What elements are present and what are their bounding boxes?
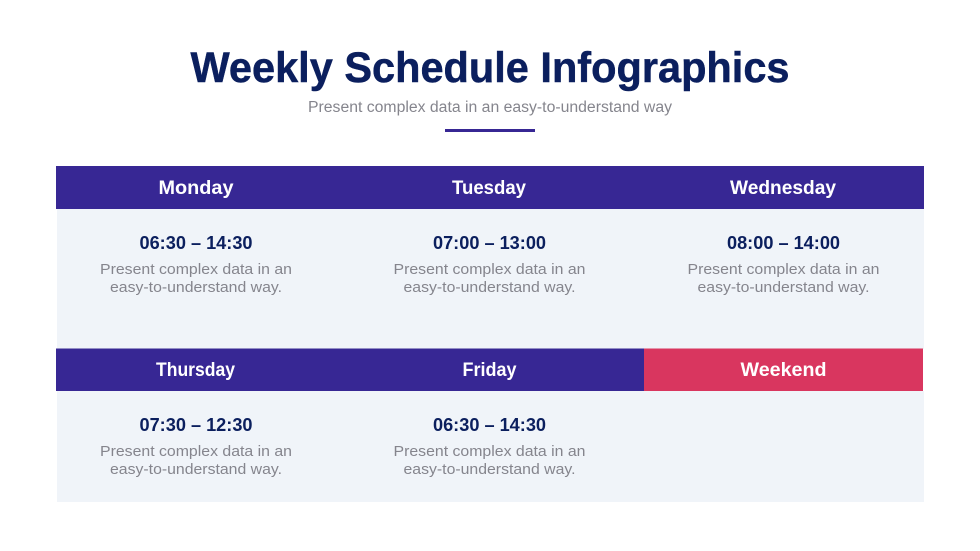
column: Tuesday: easy-to-understand way. [404,279,576,296]
column: Monday [100,178,292,296]
column: Thursday: 07:30 – 12:30 [140,414,252,435]
column: Wednesday: Present complex data in an [688,261,880,278]
column: Wednesday: easy-to-understand way. [698,279,870,296]
column: Thursday: easy-to-understand way. [110,461,282,478]
column: Friday: Present complex data in an [394,443,586,460]
column: Friday: 06:30 – 14:30 [433,414,546,435]
header bar: second row weekdays [56,348,644,391]
column: Tuesday [394,178,586,296]
column: Weekend: Weekend [740,360,826,381]
column: Wednesday: 08:00 – 14:00 [727,232,840,253]
subtitle: Present complex data in an easy-to-understand way [308,99,672,116]
column: Monday: 06:30 – 14:30 [140,232,252,253]
column: Thursday: Present complex data in an [100,443,292,460]
column: Wednesday: Wednesday [730,178,836,199]
panel: second row background [57,391,924,502]
column: Thursday [100,360,292,478]
column: Monday: Monday [158,178,234,199]
column: Tuesday: 07:00 – 13:00 [433,232,546,253]
panel: first row background [57,209,924,349]
column: Monday: easy-to-understand way. [110,279,282,296]
title underline [445,129,535,132]
column: Monday: Present complex data in an [100,261,292,278]
header bar: weekend [644,348,923,391]
header bar: first row [56,166,924,209]
column: Friday: easy-to-understand way. [404,461,576,478]
column: Friday: Friday [462,360,517,381]
column: Tuesday: Present complex data in an [394,261,586,278]
column: Friday [394,360,586,478]
column: Wednesday [688,178,880,296]
column: Thursday: Thursday [156,360,235,381]
column: Tuesday: Tuesday [452,178,526,199]
title: Weekly Schedule Infographics [190,44,790,92]
